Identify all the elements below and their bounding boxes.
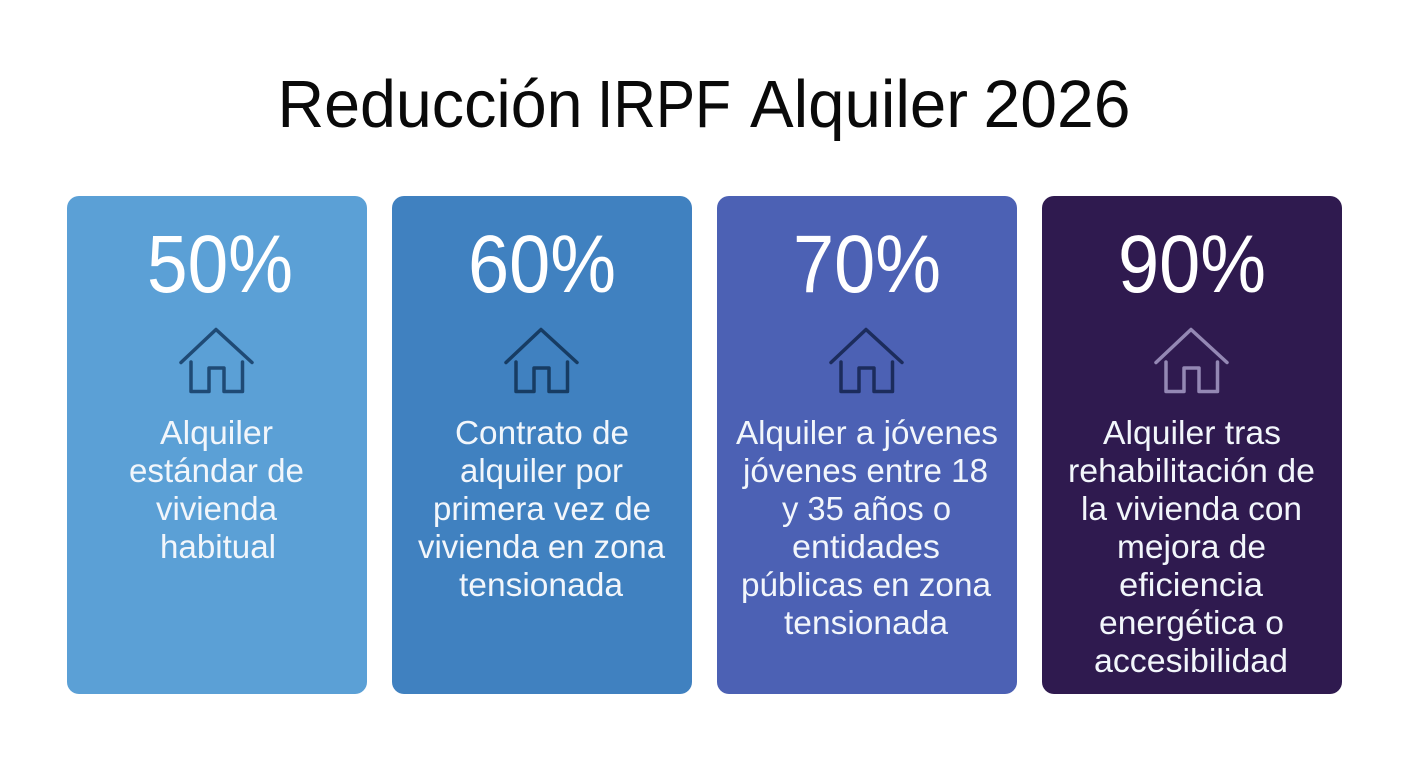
- panel: 70% jóvenes: [717, 196, 1017, 694]
- description: Alquiler a jóvenes: [736, 415, 998, 452]
- title: Reducción: [278, 67, 582, 142]
- description: primera vez de: [433, 491, 651, 528]
- description: Alquiler tras: [1103, 415, 1281, 452]
- description: [129, 415, 304, 566]
- description: tensionada: [784, 605, 948, 642]
- description: tensionada: [459, 567, 623, 604]
- description: [418, 415, 665, 604]
- title: [278, 67, 1130, 142]
- icon: house: [181, 330, 252, 392]
- panel: 60% zona tensionada: [392, 196, 692, 694]
- description: vivienda en zona: [418, 529, 665, 566]
- percentage 60%: 60%: [468, 219, 616, 310]
- description: la vivienda con: [1081, 491, 1302, 528]
- description: mejora de: [1117, 529, 1266, 566]
- description: entidades: [792, 529, 940, 566]
- description: rehabilitación de: [1068, 453, 1315, 490]
- percentage 70%: 70%: [793, 219, 941, 310]
- description: Contrato de: [455, 415, 629, 452]
- title: IRPF: [597, 67, 731, 142]
- description: [736, 415, 998, 642]
- panel: 50% estándar: [67, 196, 367, 694]
- title: 2026: [984, 67, 1130, 142]
- description: [1068, 415, 1315, 680]
- description: vivienda: [156, 491, 277, 528]
- description: jóvenes entre 18: [742, 453, 988, 490]
- description: Alquiler: [160, 415, 273, 452]
- title: Alquiler: [750, 67, 968, 142]
- percentage 90%: 90%: [1118, 219, 1266, 310]
- description: alquiler por: [460, 453, 623, 490]
- description: eficiencia: [1119, 567, 1263, 604]
- description: habitual: [160, 529, 276, 566]
- panel: 90% rehabilitación: [1042, 196, 1342, 694]
- description: accesibilidad: [1094, 643, 1288, 680]
- description: públicas en zona: [741, 567, 991, 604]
- percentage 50%: 50%: [147, 219, 293, 310]
- description: energética o: [1099, 605, 1284, 642]
- icon: house: [831, 330, 902, 392]
- description: estándar de: [129, 453, 304, 490]
- icon: house: [1156, 330, 1227, 392]
- icon: house: [506, 330, 577, 392]
- description: y 35 años o: [782, 491, 951, 528]
